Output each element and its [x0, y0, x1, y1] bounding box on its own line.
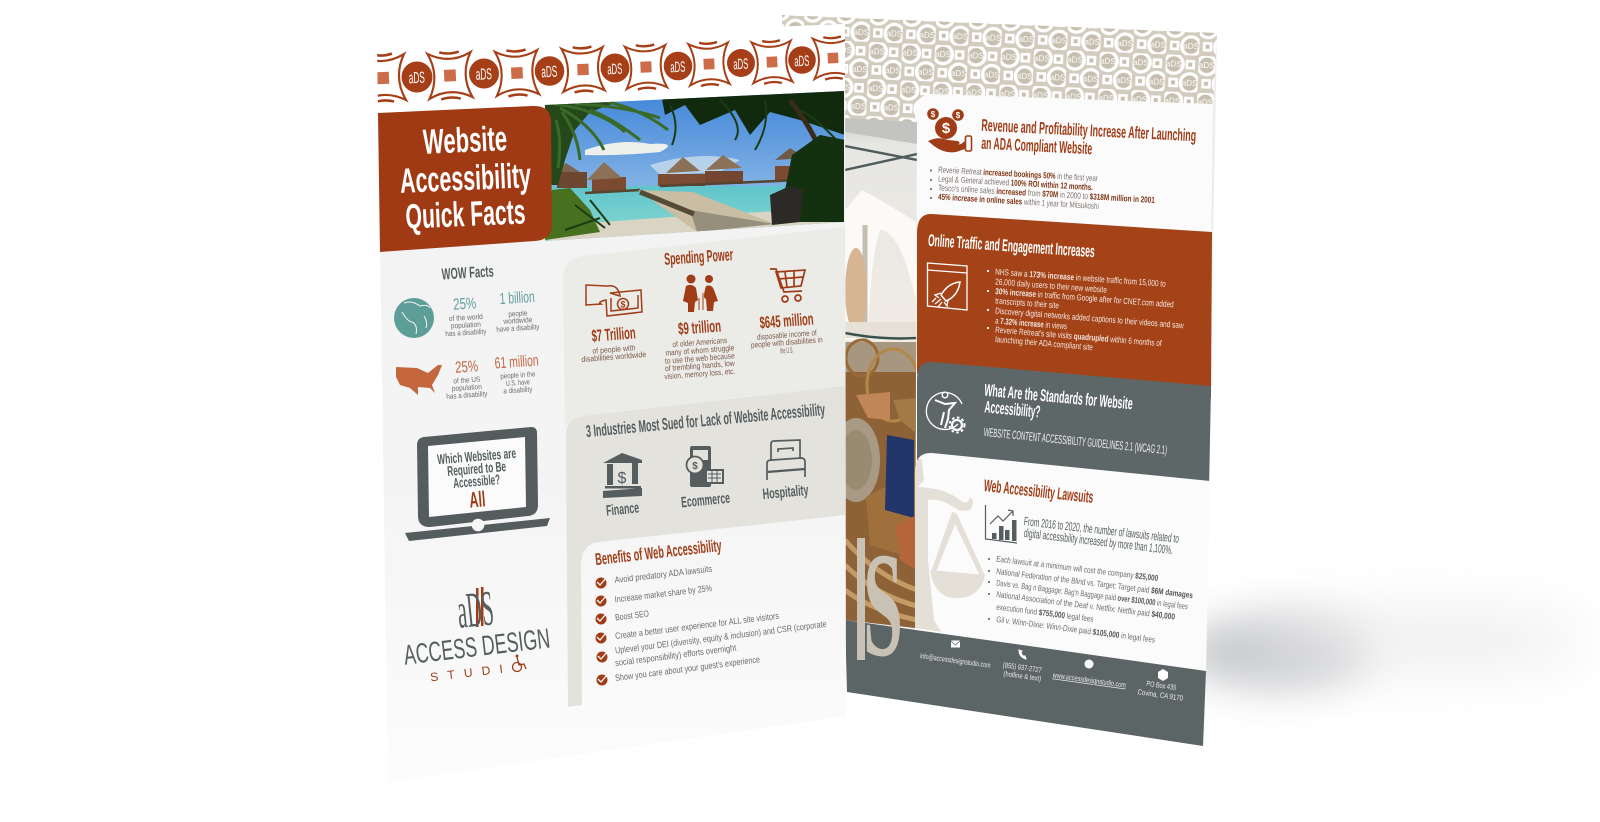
bullets: execution fund $755,000 legal fees	[996, 602, 1094, 624]
stat: 1 billion: worldwide	[502, 315, 533, 326]
icon: globe	[394, 298, 434, 338]
heading line two: an ADA Compliant Website	[981, 134, 1093, 158]
callout: which websites laptop: All	[468, 486, 486, 513]
icon: hand with money: $	[620, 300, 626, 310]
callout: which websites laptop: Required to Be	[447, 458, 507, 479]
title text: Website	[422, 119, 508, 162]
stat: 61 million: a disability	[503, 384, 533, 396]
bullets	[931, 165, 1155, 211]
stat: $7 trillion: of people with	[592, 343, 636, 356]
monogram medallions	[402, 46, 816, 92]
icon: hand with coins: $	[942, 120, 951, 137]
stat: $9 trillion: of trembling hands, low	[665, 359, 735, 373]
bullets: Tesco's online sales increased from $70M in 2000 to $318M million in 2001	[938, 183, 1155, 205]
stat: $645 million: disposable income of	[757, 328, 818, 342]
icon: check bullets	[596, 578, 608, 686]
stat: 1 billion: have a disability	[496, 322, 540, 334]
bullets: Each lawsuit at a minimum will cost the company $25,000	[996, 554, 1159, 583]
panel: back page	[782, 15, 1217, 746]
callout text: Which Websites are	[437, 445, 517, 467]
bullets: a 7.32% increase in views	[995, 316, 1067, 331]
icon: hand with coins	[927, 108, 972, 152]
monogram watermark	[857, 522, 903, 688]
bullets: Discovery digital networks added captions to their videos and saw	[995, 306, 1185, 330]
callout: which websites laptop	[405, 427, 550, 541]
bullets: launching their ADA compliant site	[995, 334, 1093, 352]
heading: Benefits of Web Accessibility	[594, 536, 723, 569]
photo: resort over water	[545, 88, 845, 246]
stat: 25% US	[446, 358, 488, 401]
huts	[554, 148, 805, 192]
stat: 61 million: people in the	[500, 369, 536, 381]
monogram medallions: aDS	[475, 66, 492, 84]
contact: email: info@accessdesignstudio.com	[920, 651, 991, 670]
wordmark: ACCESS DESIGN	[402, 622, 552, 671]
panel: lawsuits	[915, 453, 1210, 672]
bullets: National Association of the Deaf v. Netflix: Netflix paid $40,000	[996, 589, 1176, 622]
stat: $9 trillion: vision, memory loss, etc.	[664, 367, 736, 381]
page base	[845, 34, 1217, 746]
stat: 25% world	[445, 295, 487, 338]
icon: ecommerce phone	[686, 446, 723, 487]
label: finance: Finance	[605, 499, 640, 520]
contact: website	[1051, 660, 1127, 690]
contact: phone: (hotline & text)	[1003, 669, 1042, 683]
panel: wow facts	[394, 263, 540, 401]
icon: bank	[603, 453, 642, 498]
stat: $7 trillion	[581, 323, 647, 364]
bullets: 30% increase in traffic from Google after for CNET.com added	[995, 286, 1174, 309]
stat: $645 million: the U.S.	[780, 346, 794, 356]
contact: website: www.accessdesignstudio.com	[1051, 670, 1127, 690]
stat: 25% world: of the world	[449, 312, 483, 323]
icon: US map	[396, 365, 442, 395]
stat: 25% US: 25%	[455, 358, 479, 377]
logo: Access Design Studio	[402, 579, 552, 684]
contact: phone	[1002, 650, 1042, 683]
panel: spending power	[563, 227, 845, 425]
label: ecommerce: Ecommerce	[680, 490, 731, 511]
icon: hand with coins: $	[956, 111, 961, 120]
stat: 25% US: population	[452, 382, 482, 393]
bullets: NHS saw a 173% increase in website traffic from 15,000 to	[995, 267, 1166, 289]
monogram	[454, 579, 496, 639]
icon: wheelchair	[512, 655, 526, 672]
callout: which websites laptop: Accessible?	[452, 471, 501, 491]
bullets: National Federation of the Blind vs. Target: Target paid $6M damages	[996, 566, 1194, 600]
stat: 1 billion: 1 billion	[499, 289, 535, 308]
bullets: Reverie Retreat increased bookings 50% in the first year	[938, 165, 1098, 183]
title box	[378, 106, 552, 252]
stat: $645 million: people with disabilities in	[751, 335, 823, 350]
pattern header	[782, 15, 1217, 135]
stat: 1 billion	[496, 289, 540, 334]
bullets: 45% increase in online sales within 1 year for Mitsukoshi	[938, 192, 1099, 211]
title box: Quick Facts	[405, 192, 526, 237]
stat: $9 trillion: many of whom struggle	[665, 343, 735, 358]
heading: WOW Facts	[441, 263, 494, 284]
panel: front page	[377, 24, 846, 707]
stat: 25% US: of the US	[453, 375, 481, 385]
contact: address: PO Box 435	[1146, 679, 1177, 692]
benefits list: social responsibility) efforts overnight	[614, 643, 737, 668]
bullets: Davis vs. Bag n Baggage: Bag'n Baggage paid over $100,000 in legal fees	[996, 578, 1189, 611]
stat: 1 billion: people	[508, 308, 528, 319]
stat: $9 trillion	[664, 316, 736, 381]
monogram medallions: aDS	[670, 59, 686, 76]
bullets: 26,000 daily users to their new website	[995, 277, 1107, 295]
benefits list	[614, 564, 827, 683]
stat: 25% US: has a disability	[446, 389, 488, 401]
decorative pattern band	[360, 36, 853, 103]
panel: industries sued	[566, 386, 845, 707]
monogram medallions: aDS	[733, 56, 749, 73]
heading: 3 Industries Most Sued for Lack of Website Accessibility	[585, 400, 826, 441]
panel: contact footer: S	[863, 522, 903, 688]
stat: $9 trillion: of older Americans	[672, 336, 728, 349]
stat: $645 million: $645 million	[759, 310, 814, 333]
lawsuit statistic line two: digital accessibility increased by more than 1,100%.	[1023, 526, 1174, 557]
stat: $7 trillion: disabilities worldwide	[581, 350, 647, 364]
icon: accessibility gear	[926, 392, 964, 432]
stat: 25% world: has a disability	[445, 327, 487, 338]
panel: contact footer	[845, 522, 1206, 746]
benefits list: Show you care about your guest's experience	[614, 654, 761, 683]
icon: ecommerce phone: $	[692, 461, 698, 472]
palms	[545, 102, 614, 185]
brochure mockup scene	[377, 15, 1542, 746]
bullets: transcripts to their site	[995, 296, 1060, 310]
panel: standards: Accessibility?	[984, 397, 1041, 422]
label: hospitality: Hospitality	[762, 482, 810, 503]
contact: email	[920, 640, 991, 670]
stat: $645 million	[751, 310, 823, 356]
stat: 61 million: 61 million	[494, 352, 539, 373]
stat: $9 trillion: $9 trillion	[677, 316, 722, 339]
photo: rattan interior	[845, 118, 917, 628]
panel: benefits	[594, 536, 827, 686]
pier	[638, 190, 775, 232]
stat: 25% world: population	[451, 320, 481, 330]
monogram medallions: aDS	[408, 70, 425, 87]
ground shadow	[1180, 614, 1590, 688]
heading: Spending Power	[664, 245, 734, 269]
white content sheet	[915, 94, 1213, 735]
lawsuit statistic: From 2016 to 2020, the number of lawsuits related to	[1023, 514, 1180, 546]
top white band	[377, 24, 845, 113]
benefits list: Boost SEO	[615, 608, 649, 622]
bullets	[989, 554, 1194, 645]
panel: revenue increase	[927, 108, 1197, 211]
title box: Accessibility	[399, 156, 532, 201]
stat: 61 million: U.S. have	[506, 377, 530, 388]
icon: older couple	[683, 274, 718, 312]
icon: shopping cart	[770, 269, 805, 302]
logo: Access Design Studio: aDS	[454, 579, 496, 639]
heading: Revenue and Profitability Increase After Launching	[981, 116, 1197, 145]
heading: Online Traffic and Engagement Increases	[927, 231, 1095, 261]
monogram medallions: aDS	[541, 64, 558, 81]
heading: Web Accessibility Lawsuits	[983, 476, 1094, 507]
icon: hand with coins: $	[931, 110, 936, 119]
monogram medallions: aDS	[607, 61, 623, 78]
benefits list: Uplevel your DEI (diversity, equity & inclusion) and CSR (corporate	[614, 619, 827, 655]
stat: 25% world: 25%	[453, 295, 477, 314]
icon: hand with money	[586, 285, 642, 316]
bullets	[988, 267, 1185, 352]
panel: online traffic	[917, 214, 1212, 398]
panel: standards	[917, 362, 1211, 492]
benefits list: Create a better user experience for ALL site visitors	[615, 611, 780, 641]
bullets: Legal & General achieved 100% ROI within 12 months.	[938, 174, 1093, 192]
stat: $7 trillion: $7 Trillion	[591, 323, 636, 346]
monogram medallions: aDS	[794, 53, 810, 70]
stat: 61 million	[494, 352, 539, 396]
benefits list: Avoid predatory ADA lawsuits	[614, 564, 713, 585]
icon: bank: $	[618, 470, 627, 487]
studio line: STUDI	[429, 662, 504, 684]
icon: rocket window	[928, 263, 967, 310]
heading: What Are the Standards for Website	[983, 381, 1134, 413]
bullets: Gil v. Winn-Dixie: Winn-Dixie paid $105,000 in legal fees	[996, 614, 1156, 645]
page sheet	[377, 24, 846, 782]
icon: lady justice scale	[915, 454, 985, 640]
contact: address: Covina, CA 9170	[1137, 687, 1184, 703]
benefits list: Increase market share by 25%	[614, 583, 713, 604]
icon: growth chart	[986, 505, 1017, 543]
bullets: Reverie Retreat's site visits quadrupled within 6 months of	[995, 325, 1163, 348]
panel: standards: WEBSITE CONTENT ACCESSIBILITY GUIDELINES 2.1 (WCAG 2.1)	[983, 425, 1168, 457]
contact: phone: (855) 937-2727	[1002, 660, 1042, 675]
stat: $9 trillion: to use the web because	[665, 351, 735, 366]
contact: address	[1137, 669, 1184, 703]
icon: bed	[767, 440, 805, 480]
